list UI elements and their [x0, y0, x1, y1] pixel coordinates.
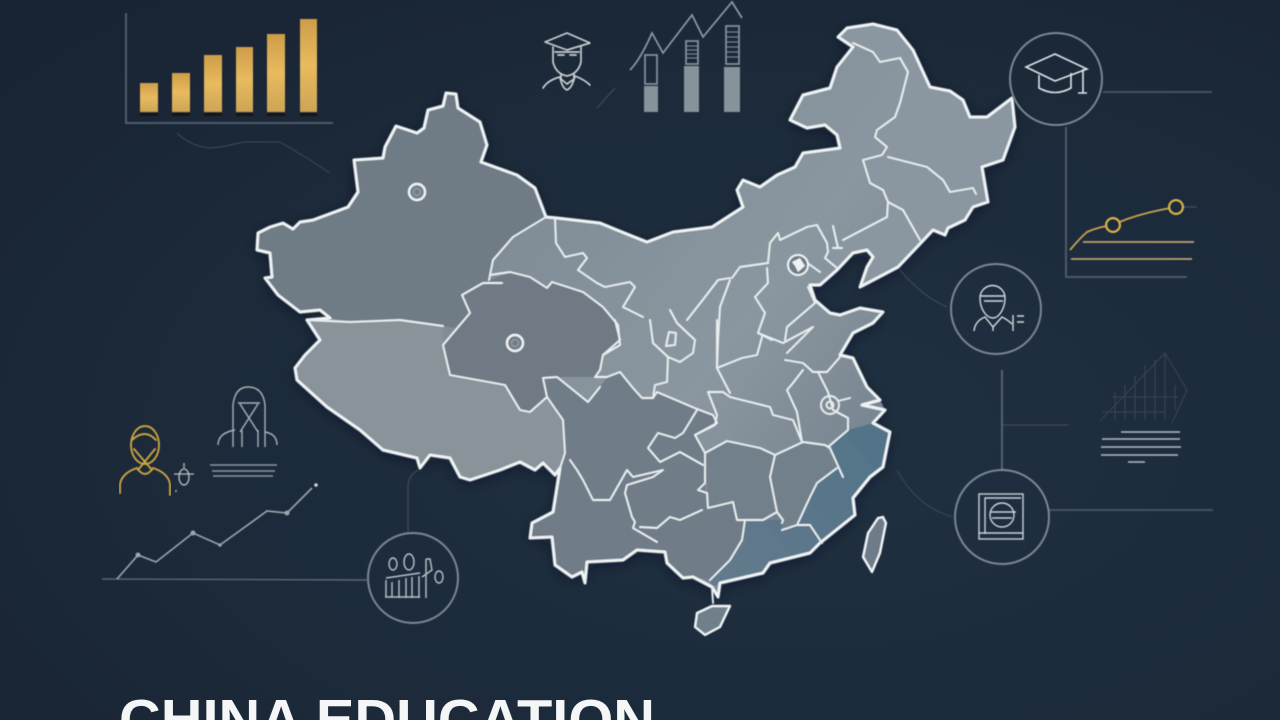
icon: book circle with connectors — [897, 370, 1213, 564]
region: Sichuan and southwest — [530, 372, 745, 583]
map base outline — [257, 24, 1015, 597]
region: Tibet — [295, 318, 565, 480]
city marker: Qinghai — [507, 335, 523, 351]
region: central south — [705, 441, 843, 530]
region: Xinjiang — [257, 93, 546, 328]
icon: people circle — [368, 470, 458, 623]
chart: faint triangle with text lines — [1100, 353, 1187, 462]
icon: graduate figure — [543, 33, 590, 90]
region: Fujian, Zhejiang, Guangdong — [710, 423, 890, 587]
city marker: Beijing — [788, 255, 808, 275]
island: Hainan — [695, 606, 730, 635]
icon: small figure — [174, 463, 194, 492]
city marker: Nanjing — [821, 396, 850, 414]
island: Taiwan — [863, 517, 886, 572]
province borders — [307, 43, 976, 603]
map of China — [257, 24, 1015, 635]
chart: rising line with gray bars — [597, 2, 742, 112]
icon: gray person with text lines — [210, 387, 277, 476]
icon: gold person — [120, 426, 170, 495]
city marker: Xinjiang — [409, 184, 425, 200]
region: Qinghai — [443, 272, 620, 412]
city marker: central loop — [666, 332, 676, 346]
chart: line chart bottom left — [102, 483, 367, 580]
bar chart: gold bars top left — [126, 13, 333, 173]
region: northeast — [828, 24, 1015, 287]
icon: graduation cap circle with connectors — [1010, 33, 1212, 277]
chart: gold curve with markers — [1070, 200, 1197, 259]
map outline stroke — [257, 24, 1015, 597]
icon: person circle — [900, 264, 1041, 354]
